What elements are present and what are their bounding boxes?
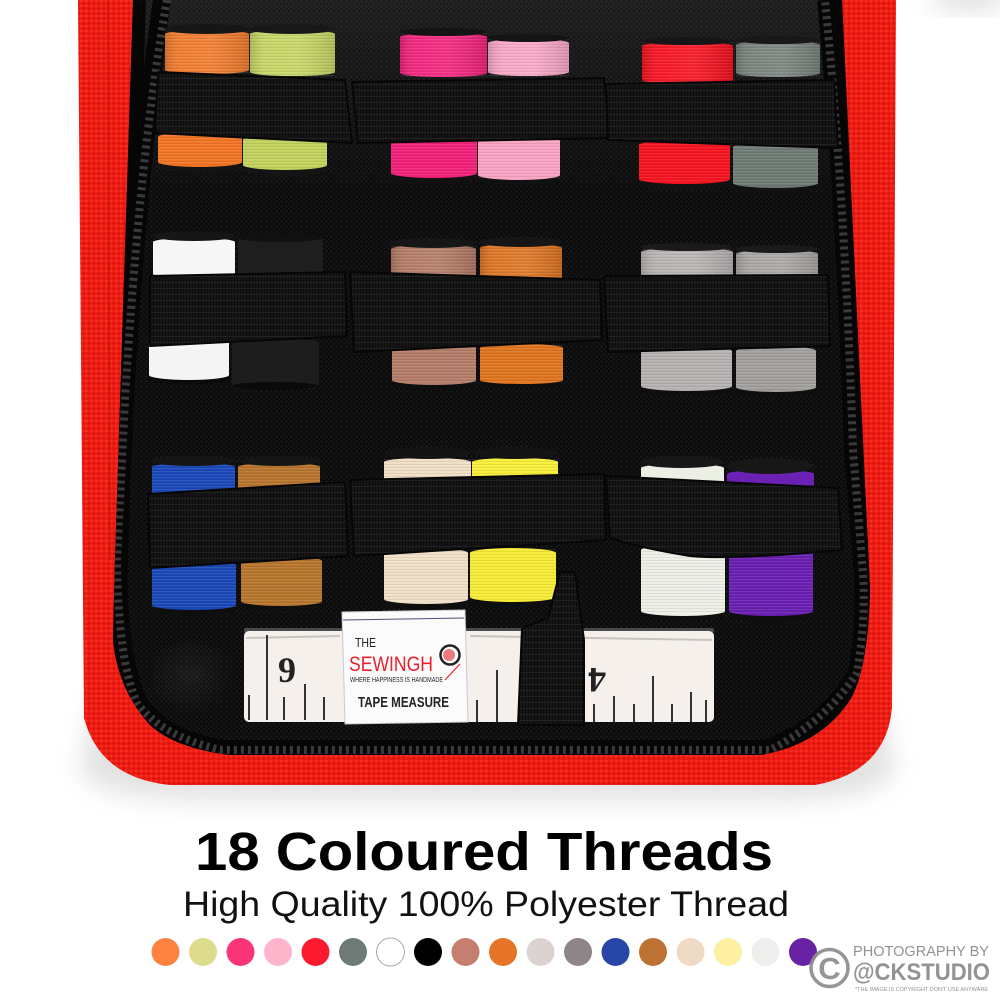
zipper <box>113 0 870 755</box>
tape measure <box>244 628 714 722</box>
subtitle: High Quality 100% Polyester Thread <box>183 885 789 924</box>
spool: brown <box>390 238 477 390</box>
spool: brown orange <box>238 456 323 611</box>
corner shadow <box>930 0 1000 7</box>
brand text: THE <box>355 635 376 650</box>
tape measure label: TAPE MEASURE <box>358 694 449 711</box>
spool: white <box>148 231 235 384</box>
spool: off white <box>640 456 725 621</box>
photography watermark <box>811 943 990 993</box>
spool: yellow <box>470 447 558 608</box>
spool: purple <box>726 458 814 622</box>
red sewing case <box>78 0 896 785</box>
tape measure label <box>342 610 468 724</box>
black interior panel <box>113 0 870 755</box>
case shadow <box>80 700 895 800</box>
spool: black <box>232 234 323 390</box>
tape measure label: WHERE HAPPINESS IS HANDMADE <box>350 675 443 684</box>
spool: dark orange <box>479 237 563 388</box>
spool: light pink <box>477 34 569 185</box>
spool: cream <box>384 447 471 609</box>
row 3 spools <box>151 447 814 622</box>
spool: grey green <box>732 36 821 193</box>
row 1 spools <box>157 24 821 193</box>
colour swatches <box>152 938 817 966</box>
spool: light grey <box>640 243 733 395</box>
spool: lime <box>242 24 335 176</box>
tape measure label: SEWINGH <box>349 653 433 676</box>
spool: blue <box>151 456 236 615</box>
row 1 elastic bands <box>155 72 838 148</box>
title: 18 Coloured Threads <box>195 822 773 882</box>
row 2 spools <box>148 231 818 397</box>
spool: grey <box>735 245 818 397</box>
row 3 elastic bands <box>148 474 842 568</box>
tape strap <box>518 572 584 725</box>
spool: red <box>638 37 733 190</box>
photography watermark: PHOTOGRAPHY BY <box>853 943 989 960</box>
tape number 4: 4 <box>588 660 606 700</box>
row 2 elastic bands <box>150 272 830 352</box>
spool: orange <box>157 24 250 173</box>
photography watermark: C <box>818 951 841 986</box>
spool: pink <box>390 28 487 184</box>
tape number 9: 9 <box>278 650 296 690</box>
photography watermark: *THE IMAGE IS COPYRIGHT DON'T USE ANYWARE <box>855 987 988 993</box>
photography watermark: @CKSTUDIO <box>853 959 990 986</box>
